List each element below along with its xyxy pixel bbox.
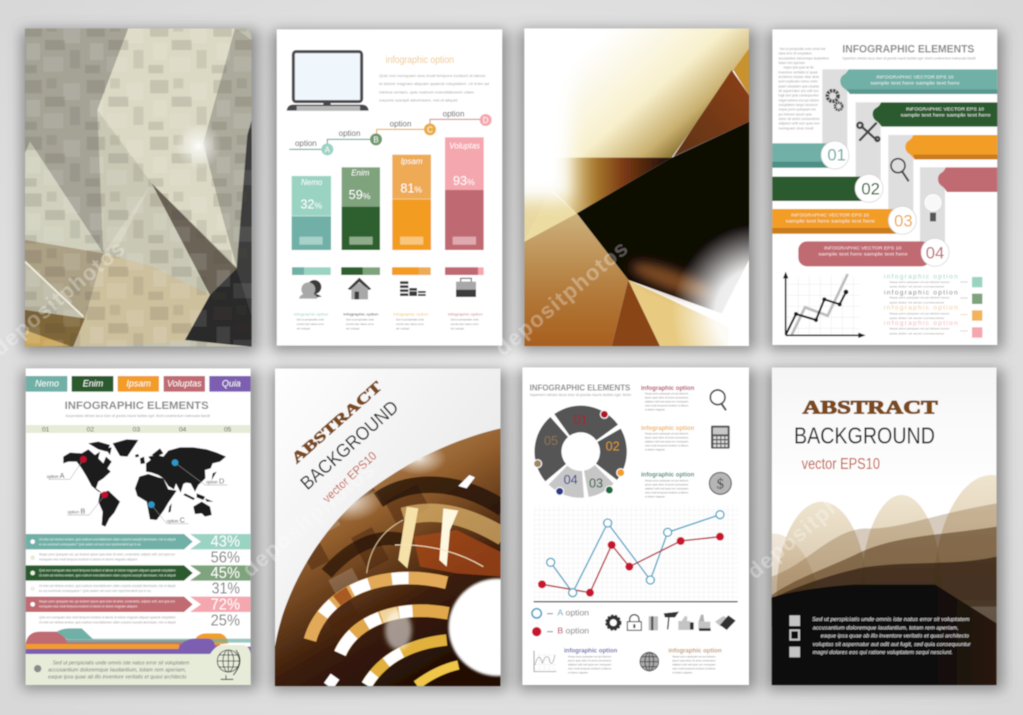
step circles 01 to 04: 02 xyxy=(861,180,880,199)
connector: option labels A to D xyxy=(289,110,492,155)
band: left teal xyxy=(772,143,829,168)
heading: infographic elements: INFOGRAPHIC ELEMENTS xyxy=(65,400,209,412)
donut chart: 03 xyxy=(589,476,603,490)
row: 25% xyxy=(39,612,240,629)
option list top: eius modi tempora incidunt ut labore xyxy=(645,404,689,408)
heading: infographic option: infographic option xyxy=(386,55,454,66)
option list top: Neque porro quisquam est qui dolorem xyxy=(645,432,689,436)
connector: option labels A to D: A xyxy=(325,145,331,154)
row: 45%: 45% xyxy=(211,565,240,582)
row: 56%: numquam eius modi tempora incidunt ut labore et dolore magnam aliquam xyxy=(39,558,137,562)
option captions: Sed ut perspiciatis unde xyxy=(297,318,324,322)
caption: left infographic option: ipsum quia dolor sit amet consectetur xyxy=(568,658,611,662)
band: rounded red: sample text here sample text here xyxy=(818,251,908,257)
numbered strip: 01 xyxy=(42,427,50,434)
bar: Ipsam 81%: Ipsam xyxy=(401,157,423,166)
connector: option labels A to D: option xyxy=(339,129,360,138)
option list top: Neque porro quisquam est qui dolorem xyxy=(645,479,689,483)
option list top xyxy=(641,385,694,499)
option list top: infographic option xyxy=(641,425,694,432)
text block: side column: architecto beatae vitae dicta xyxy=(778,75,819,79)
donut chart: 04 xyxy=(564,473,578,487)
icon: magnifier xyxy=(891,159,909,181)
option list top: adipisci velit sed quia non numquam xyxy=(645,440,689,444)
band: left orange: sample text here sample text here xyxy=(786,219,875,225)
icon: briefcase xyxy=(456,278,476,297)
icon: stacked bars xyxy=(400,281,426,296)
chart: line comparison A and B xyxy=(533,506,738,602)
nav tabs: Quia xyxy=(222,379,241,389)
row: 56%: Neque porro quisquam est, qui dolorem ipsum quia dolor sit amet, consectetur, adipisci velit, sed quia non xyxy=(39,553,175,557)
bar: Nemo 32% xyxy=(292,176,331,250)
option captions: Sed ut perspiciatis unde xyxy=(346,318,375,322)
option captions: sit volupt xyxy=(451,326,464,330)
step circles 01 to 04 xyxy=(821,141,949,266)
row: 56%: 56% xyxy=(211,550,240,567)
text block: side column xyxy=(778,47,829,130)
band: teal top: sample text here sample text here xyxy=(870,81,960,87)
text block: side column: dolor sit amet consectetur xyxy=(778,117,821,121)
caption: left infographic option: Neque porro quisquam est qui dolorem xyxy=(568,654,612,658)
nav tabs xyxy=(26,376,251,392)
numbered strip: 02 xyxy=(87,427,94,434)
watermark: diagonal depositphotos marks xyxy=(0,236,885,584)
row: 43%: Ut enim ad minima veniam, quis nostrum exercitationem ullam corporis suscipit laboriosam, nisi ut aliquid xyxy=(39,537,176,541)
nav tabs: Enim xyxy=(83,379,104,389)
text block: description xyxy=(812,617,972,656)
bar: Enim 59%: Enim xyxy=(351,169,370,178)
step circles 01 to 04: 01 xyxy=(827,146,846,165)
legend: infographic options: infographic option xyxy=(884,320,958,327)
legend: A and B options: B option xyxy=(557,626,589,636)
donut chart: 02 xyxy=(606,440,620,454)
band: left orange: INFOGRAPHIC VECTOR EPS 10 xyxy=(791,213,869,219)
option captions: infographic option xyxy=(343,312,378,316)
row: 31% xyxy=(30,581,240,598)
option list top: et dolore magnam xyxy=(645,495,666,499)
caption: left infographic option: infographic option xyxy=(564,647,617,654)
panel: donut and line chart infographic xyxy=(522,367,749,685)
legend: infographic options: quia dolor sit amet consectetur xyxy=(889,301,945,304)
legend: infographic options xyxy=(884,273,982,338)
option captions: Sed ut perspiciatis unde xyxy=(451,318,479,322)
icon: light bulb xyxy=(925,195,941,221)
footer note panel: accusantium doloremque laudantium, totam rem aperiam, xyxy=(48,667,186,673)
text block: side column: fugit sed quia consequuntur xyxy=(778,94,820,98)
connector: option labels A to D: option xyxy=(295,139,317,148)
text block: side column: eaque ipsa quae ab illo xyxy=(784,66,814,70)
heading: infographic elements: INFOGRAPHIC ELEMENTS xyxy=(530,384,631,393)
bar: Voluptas 93%: 93% xyxy=(453,174,475,188)
row: 45%: Quis non numquam eius modi tempora incidunt ut labore et dolore magnam aliquam quaerat voluptatem xyxy=(39,568,176,572)
icon: calculator xyxy=(711,426,730,449)
band: red top xyxy=(938,167,997,192)
caption: left infographic option: et dolore magnam xyxy=(568,670,589,674)
nav tabs: Nemo xyxy=(35,379,59,389)
option list top: ipsum quia dolor sit amet consectetur xyxy=(645,396,688,400)
row: 25%: Ut enim ad minima veniam, quis nostrum exercitationem ullam corporis suscipit laboriosam, nisi ut aliquid xyxy=(39,620,176,624)
wave artwork xyxy=(770,474,998,684)
panel: numbered process infographic xyxy=(772,29,997,345)
text block: description: Sed ut perspiciatis unde omnis iste natus error sit voluptatem xyxy=(812,617,970,623)
connector: option labels A to D: C xyxy=(427,125,433,134)
panel: golden polygon abstract cover xyxy=(524,28,750,347)
watermark: diagonal depositphotos marks: depositphotos xyxy=(742,459,885,584)
row: 43% xyxy=(26,534,251,551)
row: 43%: ex ea commodi consequatur? Quis autem vel eum iure reprehenderit qui in ea xyxy=(39,542,141,546)
connector: option labels A to D: option xyxy=(390,119,411,128)
connector: option labels A to D: D xyxy=(483,116,489,125)
option captions: omnis iste natus error xyxy=(297,322,324,326)
text block: side column: Sed ut perspiciatis unde omnis iste xyxy=(780,47,826,51)
option captions: infographic option xyxy=(393,312,428,316)
caption: right infographic option: infographic option xyxy=(668,647,722,654)
row: 72%: 72% xyxy=(211,596,240,613)
panel: geometric grey abstract cover xyxy=(25,28,252,347)
caption: right infographic option: et dolore magnam xyxy=(672,670,693,674)
option captions: Sed ut perspiciatis unde xyxy=(396,318,425,322)
row: 31%: 31% xyxy=(212,581,240,598)
callouts: map options A to D: option B xyxy=(67,506,85,515)
bar: Ipsam 81%: 81% xyxy=(400,182,422,196)
row: 72%: numquam eius modi tempora incidunt ut labore et dolore magnam aliquam xyxy=(39,605,137,609)
text block: side column: sunt explicabo nemo enim xyxy=(778,80,818,84)
option captions: omnis iste natus error xyxy=(451,322,479,326)
legend: infographic options: quia dolor sit amet consectetur xyxy=(889,332,945,335)
panel: option bars infographic xyxy=(277,29,502,346)
text block: side column: totam rem aperiam xyxy=(778,61,805,65)
donut chart xyxy=(534,406,627,498)
legend: infographic options: Neque porro quisquam est qui dolorem ipsum xyxy=(889,328,949,331)
subheading: Suspendisse ultricies lacus dolor sit gravida mauris facilisis eget. Morbi condimentum malesuada blandit xyxy=(65,414,210,418)
legend: infographic options: quia dolor sit amet consectetur xyxy=(889,286,945,289)
icon: magnifier xyxy=(710,390,726,410)
white circle xyxy=(446,576,502,678)
band: green top xyxy=(873,102,997,127)
watermark: diagonal depositphotos marks: depositphotos xyxy=(490,236,633,361)
panel: abstract background disc cover xyxy=(274,368,502,687)
icon: dollar coin xyxy=(709,472,731,494)
chart icon: small wave xyxy=(534,651,556,672)
row: 25%: Quis non numquam eius modi tempora incidunt ut labore et dolore magnam aliquam quaerat voluptatem xyxy=(39,615,176,619)
option captions: sit volupt xyxy=(297,326,310,330)
black footer area xyxy=(772,585,997,685)
text block: description: voluptas sit aspernatur aut odit aut fugit, sed quia consequuntur xyxy=(813,642,972,648)
heading: infographic elements: INFOGRAPHIC ELEMENTS xyxy=(842,44,974,56)
band: left green xyxy=(772,177,862,201)
option list top: Neque porro quisquam est qui dolorem xyxy=(645,392,689,396)
option list top: eius modi tempora incidunt ut labore xyxy=(645,491,689,495)
chart: growth line xyxy=(783,272,866,338)
title: vector EPS10: vector EPS10 xyxy=(802,456,880,473)
callouts: map options A to D: option A xyxy=(47,471,65,480)
progress strips xyxy=(292,267,484,275)
legend: infographic options: Neque porro quisquam est qui dolorem ipsum xyxy=(889,312,949,315)
text block: side column: qui dolorem ipsum quia xyxy=(778,112,812,116)
icon: people xyxy=(299,280,322,299)
text block: intro: Quis non numquam eius modi tempora incidunt ut labore xyxy=(379,74,486,78)
text block: intro xyxy=(379,74,489,102)
option captions: omnis iste natus error xyxy=(346,322,374,326)
caption: right infographic option: Neque porro quisquam est qui dolorem xyxy=(672,654,716,658)
bar: Voluptas 93% xyxy=(445,137,484,250)
title: BACKGROUND: BACKGROUND xyxy=(794,423,935,449)
option list top: eius modi tempora incidunt ut labore xyxy=(645,444,689,448)
icon row: tools xyxy=(606,612,736,631)
row: 31%: Ut enim ad minima veniam, quis nostrum exercitationem ullam corporis suscipit laboriosam, nisi ut aliquid xyxy=(39,584,176,588)
footer note panel: Sed ut perspiciatis unde omnis iste natus error sit voluptatem xyxy=(53,660,190,666)
option captions: infographic option xyxy=(448,312,483,316)
legend: infographic options: infographic option xyxy=(884,273,958,280)
icon: house xyxy=(348,278,371,299)
band: teal top: INFOGRAPHIC VECTOR EPS 10 xyxy=(876,75,954,81)
subheading: Sapientem ultricies lacus dolor sit gravida mauris facilisis eget. Morbi xyxy=(530,393,631,397)
option list top: infographic option xyxy=(641,385,694,392)
option list top: et dolore magnam xyxy=(645,448,666,452)
row: 56% xyxy=(30,550,240,567)
caption: right infographic option: eius modi tempora incidunt ut labore xyxy=(672,666,716,670)
text block: side column: adipisci velit sed quia non xyxy=(778,122,820,126)
caption: left infographic option: adipisci velit sed quia non numquam xyxy=(568,662,612,666)
option list top: et dolore magnam xyxy=(645,408,666,412)
row: 72% xyxy=(26,596,251,613)
bar: Ipsam 81% xyxy=(392,155,431,250)
icon: gears xyxy=(827,91,842,110)
subheading: Sapientem ultricies lacus dolor sit gravida mauris facilisis eget. Morbi condimentum malesuada blandit xyxy=(842,57,976,61)
donut chart: 05 xyxy=(544,434,558,448)
option list top: adipisci velit sed quia non numquam xyxy=(645,487,689,491)
caption: left infographic option xyxy=(564,647,617,674)
row: 43%: 43% xyxy=(211,534,240,551)
grey connector columns xyxy=(822,69,945,252)
bar: Enim 59%: 59% xyxy=(349,188,371,202)
text block: side column: accusantium doloremque laudantium xyxy=(778,56,829,60)
title: BACKGROUND: BACKGROUND xyxy=(296,396,402,494)
disc artwork xyxy=(274,428,502,687)
callouts: map options A to D: option D xyxy=(206,476,224,485)
legend: A and B options: A option xyxy=(557,608,589,618)
text block: intro: minima veniam, quis nostrum exercitationem ullam xyxy=(379,90,474,94)
numbered strip: 03 xyxy=(133,427,140,434)
text block: side column: magni dolores eos qui ratione xyxy=(778,98,819,102)
row: 31%: ex ea commodi consequatur? Quis autem vel eum iure reprehenderit qui in ea xyxy=(39,589,151,593)
option list top: adipisci velit sed quia non numquam xyxy=(645,400,689,404)
donut chart: 01 xyxy=(574,413,588,427)
nav tabs: Voluptas xyxy=(167,379,202,389)
row: 45%: Ut enim ad minima veniam, quis nostrum exercitationem ullam corporis suscipit laboriosam, nisi ut aliquid xyxy=(39,573,176,577)
text block: side column: ipsam voluptatem quia voluptas xyxy=(778,84,819,88)
legend: infographic options: infographic option xyxy=(884,289,958,296)
step circles 01 to 04: 04 xyxy=(926,244,944,263)
caption: right infographic option xyxy=(668,647,722,674)
band: teal top xyxy=(840,69,997,94)
text block: side column: voluptatem sequi nesciunt xyxy=(778,103,818,107)
panel: world map infographic xyxy=(26,368,251,685)
legend: A and B options xyxy=(532,608,589,636)
icon: wrench and screwdriver xyxy=(857,123,879,141)
row: 72%: Neque porro quisquam est, qui dolorem ipsum quia dolor sit amet, consectetur, adipisci velit, sed quia non xyxy=(39,600,175,604)
text block: side column: sit aspernatur aut odit aut xyxy=(778,89,818,93)
option list top: ipsum quia dolor sit amet consectetur xyxy=(645,436,688,440)
text block: intro: et dolore magnam aliquam quaerat voluptatem. Ut enim ad xyxy=(379,82,489,86)
icon: laptop xyxy=(287,52,369,111)
text block: description: eaque ipsa quae ab illo inventore veritatis et quasi architecto xyxy=(821,634,969,640)
band: rounded red xyxy=(798,241,930,266)
row: 25%: 25% xyxy=(211,612,240,629)
footer wave shapes xyxy=(26,628,251,654)
caption: left infographic option: eius modi tempora incidunt ut labore xyxy=(568,666,612,670)
title: ABSTRACT: ABSTRACT xyxy=(289,379,386,467)
text block: description: magni dolores eos qui ratione voluptatem sequi nesciunt. xyxy=(813,650,953,656)
numbered strip: 04 xyxy=(179,427,187,434)
text block: side column: numquam eius modi xyxy=(778,126,814,130)
icon: dollar coin: $ xyxy=(717,477,724,493)
band: rounded red: INFOGRAPHIC VECTOR EPS 10 xyxy=(824,245,902,251)
panel: abstract background wave cover xyxy=(770,367,998,686)
bar: Nemo 32%: 32% xyxy=(300,198,322,212)
callouts: map options A to D: option C xyxy=(167,515,186,524)
text block: side column: neque porro quisquam est xyxy=(778,108,816,112)
callouts: map options A to D xyxy=(47,456,227,524)
footer note panel: eaque ipsa quae ab illo inventore veritatis et quasi architecto xyxy=(48,674,186,680)
connector: option labels A to D: B xyxy=(373,135,379,144)
legend: infographic options: infographic option xyxy=(884,305,958,312)
text block: description: accusantium doloremque laudantium, totam rem aperiam, xyxy=(813,625,959,631)
legend: infographic options: Neque porro quisquam est qui dolorem ipsum xyxy=(889,281,949,284)
band: green top: sample text here sample text here xyxy=(901,113,991,119)
band: left orange xyxy=(772,209,896,234)
text block: side column: inventore veritatis et quasi xyxy=(778,70,818,74)
bar: Nemo 32%: Nemo xyxy=(301,178,323,187)
band: green top: INFOGRAPHIC VECTOR EPS 10 xyxy=(906,107,984,113)
caption: right infographic option: adipisci velit sed quia non numquam xyxy=(672,662,716,666)
connector: option labels A to D: option xyxy=(443,110,464,119)
watermark: diagonal depositphotos marks: depositphotos xyxy=(237,457,380,582)
numbered strip xyxy=(26,425,251,434)
band: orange top xyxy=(905,135,997,159)
title: vector EPS10: vector EPS10 xyxy=(320,448,380,506)
step circles 01 to 04: 03 xyxy=(894,212,913,231)
numbered strip: 05 xyxy=(224,427,232,434)
caption: right infographic option: ipsum quia dolor sit amet consectetur xyxy=(672,658,716,662)
nav tabs: Ipsam xyxy=(126,379,151,389)
option list top: ipsum quia dolor sit amet consectetur xyxy=(645,483,688,487)
icon: globe xyxy=(217,650,240,679)
title: ABSTRACT: ABSTRACT xyxy=(803,397,938,418)
text block: intro: corporis suscipit laboriosam, nisi ut aliquid xyxy=(379,98,457,102)
bar: Enim 59% xyxy=(342,167,380,250)
option list top: infographic option xyxy=(641,472,694,479)
footer note panel xyxy=(26,645,251,685)
bar: Voluptas 93%: Voluptas xyxy=(449,141,480,150)
squares indicator xyxy=(789,615,800,657)
option captions: infographic option xyxy=(294,312,328,316)
option captions: sit volupt xyxy=(396,326,410,330)
icon: globe xyxy=(640,652,659,671)
legend: infographic options: quia dolor sit amet consectetur xyxy=(889,317,945,320)
row: 45% xyxy=(26,565,251,582)
text block: side column: natus error sit voluptatem xyxy=(778,52,812,56)
option captions: omnis iste natus error xyxy=(396,322,424,326)
option captions xyxy=(294,312,483,330)
option captions: sit volupt xyxy=(346,326,360,330)
map: world continents xyxy=(63,439,226,527)
legend: infographic options: Neque porro quisquam est qui dolorem ipsum xyxy=(889,297,949,300)
